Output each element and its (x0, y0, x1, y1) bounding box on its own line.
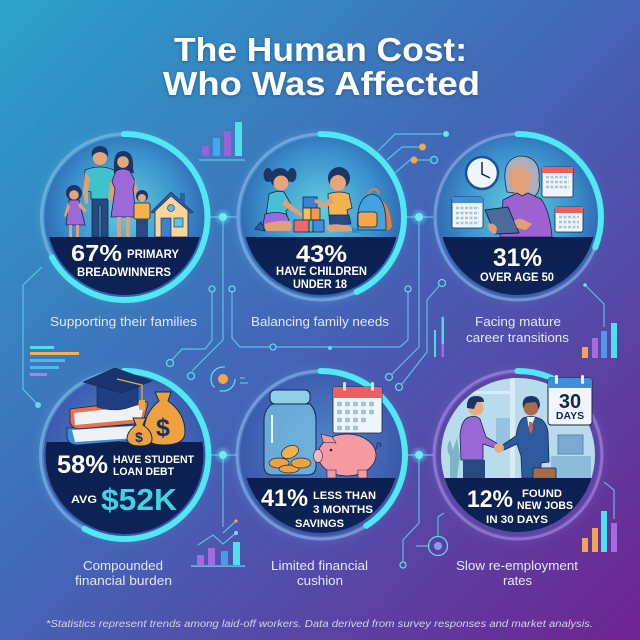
caption: limited financial cushion (271, 558, 368, 588)
icon: 30 days calendar: DAYS (556, 410, 584, 422)
stat text (57, 451, 194, 517)
stat text: 31% (493, 244, 542, 272)
stat text: LOAN DEBT (113, 466, 174, 478)
stat text (261, 485, 376, 530)
stat text: NEW JOBS (517, 500, 573, 512)
stat text: 12% (467, 486, 513, 513)
title: The Human Cost: (174, 31, 467, 68)
icon: children with blocks and backpack (255, 167, 392, 233)
stat text: IN 30 DAYS (486, 514, 548, 526)
icon: graduation cap, books and money bags: $ (135, 429, 143, 445)
ring (435, 134, 601, 300)
circuit connectors (23, 131, 614, 568)
icon: lower line and bar chart (191, 519, 245, 567)
title (163, 31, 480, 102)
icon: jar, coins, piggy bank, calendar (264, 382, 382, 478)
caption: compounded financial burden: Compounded (83, 558, 163, 573)
caption: slow re-employment rates: rates (503, 573, 532, 588)
caption: facing mature career transitions: Facing mature (475, 314, 561, 329)
footnote: *Statistics represent trends among laid-off workers. Data derived from survey responses and market analysis. (46, 618, 593, 630)
stat text: BREADWINNERS (77, 267, 171, 279)
icon: clock, woman, calendars (452, 156, 583, 237)
caption: limited financial cushion: cushion (297, 573, 343, 588)
ring (434, 371, 602, 539)
stat text (480, 244, 554, 284)
title: Who Was Affected (163, 65, 480, 102)
panel: over age 50 (433, 131, 604, 302)
icon: top bar chart (199, 122, 245, 160)
stat text: LESS THAN (313, 490, 376, 502)
stat text: 43% (296, 241, 347, 268)
caption: balancing family needs: Balancing family needs (251, 314, 390, 329)
caption: limited financial cushion: Limited financial (271, 558, 368, 573)
ring (40, 371, 208, 539)
caption: supporting their families: Supporting their families (50, 314, 198, 329)
stat text: 41% (261, 485, 308, 512)
stat text: 67% (71, 240, 122, 266)
caption: facing mature career transitions: career transitions (466, 330, 570, 345)
ring (238, 134, 404, 300)
stat text (276, 241, 367, 291)
ring (42, 134, 208, 300)
caption: slow re-employment rates: Slow re-employment (456, 558, 578, 573)
icon: legend lines (30, 346, 79, 376)
ring (237, 371, 405, 539)
icon: lower right bars (582, 511, 617, 552)
icon: 30 days calendar: 30 (559, 391, 581, 413)
caption: slow re-employment rates (456, 558, 578, 588)
stat text: $52K (101, 482, 178, 517)
icon: orbit node (211, 367, 248, 391)
stat text: UNDER 18 (293, 279, 348, 291)
panel: student loan debt (30, 368, 220, 547)
panel: less than 3 months savings (230, 370, 420, 548)
caption: facing mature career transitions (466, 314, 570, 345)
icon: graduation cap, books and money bags (67, 368, 185, 446)
stat text: 3 MONTHS (313, 504, 373, 516)
stat text: AVG (71, 494, 97, 506)
icon: middle small bars (434, 317, 444, 357)
icon: right upper bars (582, 323, 617, 358)
panel: primary breadwinners (39, 131, 211, 304)
icon: handshake in office (440, 375, 600, 480)
stat text (71, 240, 179, 279)
icon: family and house (64, 146, 193, 237)
stat text: HAVE CHILDREN (276, 266, 367, 278)
stat text: SAVINGS (295, 518, 344, 530)
caption: compounded financial burden: financial burden (75, 573, 172, 588)
panel: found new jobs in 30 days (432, 368, 604, 541)
icon: graduation cap, books and money bags: $ (156, 414, 170, 442)
stat text: OVER AGE 50 (480, 272, 554, 284)
icon: target node (416, 513, 448, 556)
stat text: HAVE STUDENT (113, 454, 194, 466)
icon: 30 days calendar (548, 375, 592, 425)
stat text: FOUND (522, 488, 562, 500)
stat text: PRIMARY (127, 249, 179, 261)
panel: children under 18 (230, 133, 420, 307)
stat text (467, 486, 573, 526)
caption: compounded financial burden (75, 558, 172, 588)
stat text: 58% (57, 451, 108, 479)
